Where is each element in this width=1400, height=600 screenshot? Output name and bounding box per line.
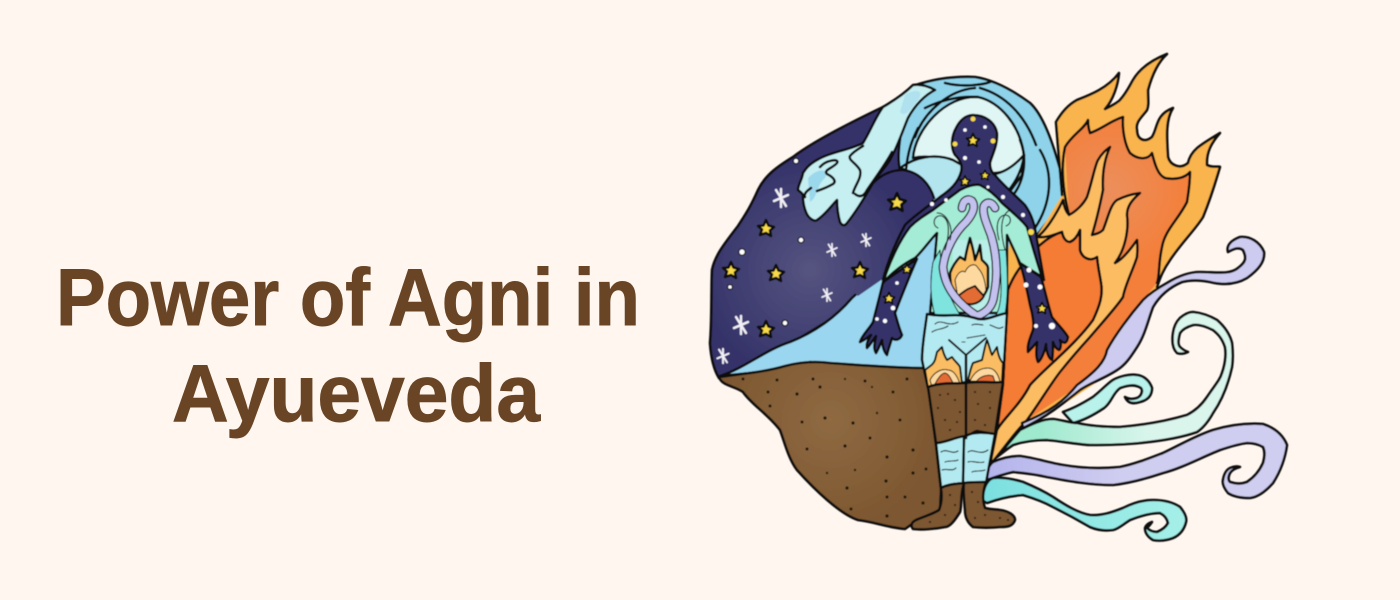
teal curl ribbon: [1063, 375, 1152, 423]
fire tongues flowing into yellow ribbon: [990, 147, 1140, 465]
right knee flame: [968, 340, 1003, 382]
water wave reaching left: [798, 85, 935, 225]
navy hump behind the shoulder: [830, 170, 934, 296]
left arm and hand: [860, 259, 917, 355]
water ripple marks: [932, 322, 1003, 355]
stars and dots on figure: [875, 116, 1055, 329]
lavender curl ribbon upper: [1022, 237, 1264, 428]
earth speckles: [742, 378, 928, 518]
abdomen teal glow: [931, 250, 1007, 315]
illustration: Agni figure among the five elements: [710, 54, 1287, 541]
sky blue air region: [720, 215, 1040, 376]
mint long curl ribbon: [997, 312, 1233, 457]
fire lower orange sheet left: [997, 230, 1102, 430]
title: Power of Agni in: [56, 253, 640, 343]
title: Ayueveda: [172, 349, 541, 439]
leg speckles: [929, 391, 1009, 523]
left knee flame: [925, 347, 962, 388]
lavender energy channels: [934, 200, 1010, 316]
figure silhouette: head and shoulders: [883, 115, 1044, 285]
legs earth and water banding: [912, 355, 1015, 529]
stars and sparks in night sky: [717, 158, 871, 363]
title: [56, 253, 640, 439]
figure waist and thighs water: [922, 313, 1007, 388]
fire flame inner orange: [1027, 117, 1190, 420]
fire flame outer: [985, 54, 1220, 462]
night sky ether region: [710, 107, 935, 378]
arching water bands behind figure: [899, 77, 1068, 235]
right arm and hand: [1020, 263, 1068, 362]
lavender long curl ribbon: [987, 424, 1287, 498]
teal bottom curl ribbon: [982, 478, 1186, 541]
figure chest and torso mint: [883, 185, 1042, 313]
belly flame: [950, 238, 988, 304]
earth ground region: [719, 362, 941, 529]
